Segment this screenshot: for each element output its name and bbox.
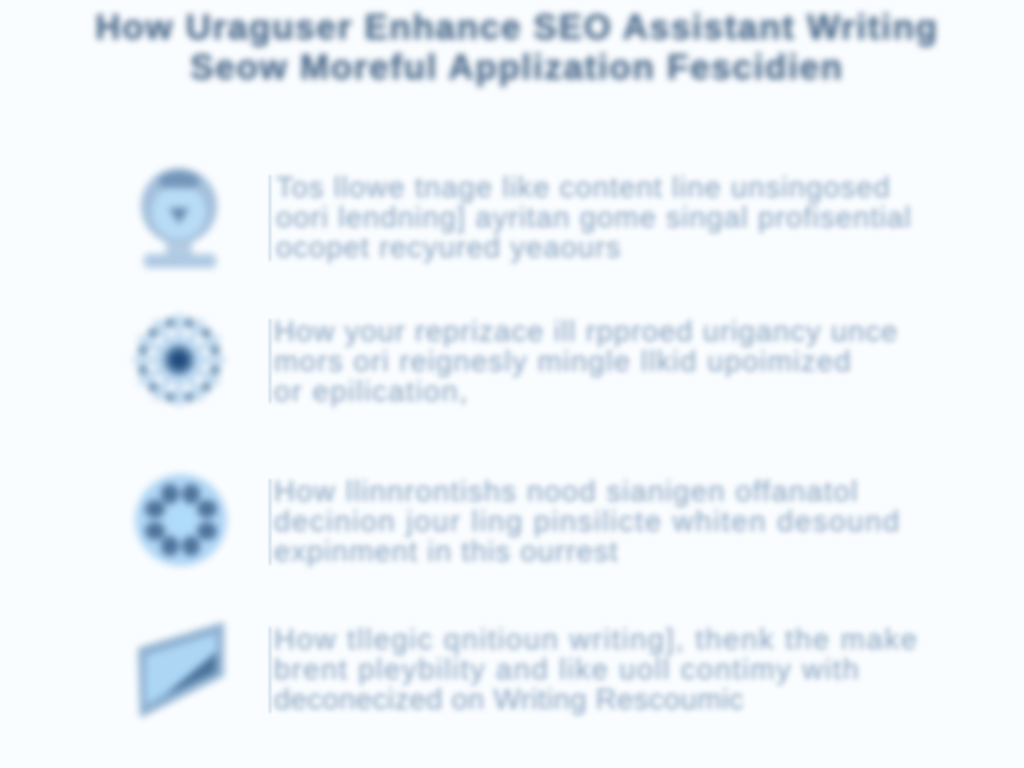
paragraph 4 [272,624,919,718]
paragraph 4: deconecized on Writing Rescoumic [274,684,744,716]
icon: segmented circle [130,470,232,570]
paragraph 2 [272,316,900,410]
title: How Uraguser Enhance SEO Assistant Writing [95,8,939,47]
paragraph 3: How llinnrontishs nood sianigen offanatol [274,476,859,508]
icon: radial burst [130,310,228,410]
text block 2 [268,316,900,410]
title: Seow Moreful Applization Fescidien [190,48,844,87]
paragraph 3 [272,476,902,570]
paragraph 1: oori lendning] ayritan gome singal profisential [276,202,912,234]
title [92,8,940,92]
paragraph 4: brent pleybility and like uoll contimy with [274,654,860,686]
paragraph 1: ocopet recyured yeaours [276,232,622,264]
paragraph 2: How your reprizace ill rpproed urigancy unce [274,316,898,348]
text bar 3 [269,479,271,565]
paragraph 3: decinion jour ling pinsilicte whiten desound [274,506,901,538]
icon: webcam [136,163,222,272]
text bar 1 [269,175,271,261]
paragraph 1: Tos llowe tnage like content line unsingosed [276,172,891,204]
text block 3 [268,476,902,570]
paragraph 4: How tllegic qnitioun writing], thenk the make [274,624,919,656]
icon: slanted panel [133,618,229,721]
text bar 4 [269,627,271,713]
paragraph 2: mors ori reignesly mingle llkid upoimized [274,346,852,378]
text bar 2 [269,319,271,403]
paragraph 2: or epilication, [274,376,469,408]
text block 4 [268,624,919,718]
paragraph 1 [274,172,913,266]
text block 1 [268,172,913,266]
paragraph 3: expinment in this ourrest [274,536,619,568]
